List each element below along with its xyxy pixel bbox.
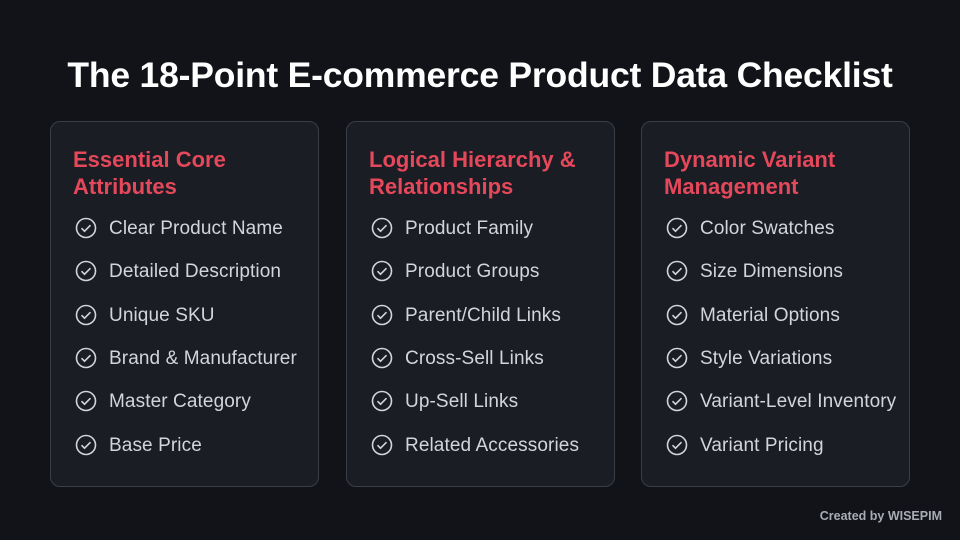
panel: hierarchy: Cross-Sell Links xyxy=(405,348,544,369)
panel: core attributes: Base Price xyxy=(109,435,202,456)
item xyxy=(372,304,561,326)
heading: variants: Management xyxy=(664,174,798,199)
panel: variants: Material Options xyxy=(700,305,840,326)
panel: core attributes: Master Category xyxy=(109,391,251,412)
panel: variants: Size Dimensions xyxy=(700,261,843,282)
heading: core: Essential Core xyxy=(73,147,226,172)
credit: Created by WISEPIM xyxy=(820,509,942,523)
panel: variants: Color Swatches xyxy=(700,218,834,239)
item xyxy=(76,260,281,282)
item xyxy=(76,304,215,326)
item xyxy=(666,434,824,456)
item xyxy=(372,260,539,282)
heading: variants xyxy=(664,147,835,199)
item xyxy=(76,348,297,369)
panel: core attributes: Clear Product Name xyxy=(109,218,283,239)
title: The 18-Point E-commerce Product Data Checklist xyxy=(67,55,893,95)
item xyxy=(76,218,283,239)
item xyxy=(666,390,896,412)
panel: variants: Variant Pricing xyxy=(700,435,824,456)
panel: hierarchy: Product Family xyxy=(405,218,533,239)
panel: core attributes: Detailed Description xyxy=(109,261,281,282)
item xyxy=(666,348,832,369)
item xyxy=(666,260,843,282)
item xyxy=(372,390,518,412)
panel: hierarchy: Parent/Child Links xyxy=(405,305,561,326)
panel: variants: Style Variations xyxy=(700,348,832,369)
item xyxy=(372,218,533,239)
panel: hierarchy: Up-Sell Links xyxy=(405,391,518,412)
panel: variants xyxy=(641,121,910,487)
heading: variants: Dynamic Variant xyxy=(664,147,835,172)
item xyxy=(76,434,202,456)
item xyxy=(372,434,579,456)
heading: core xyxy=(73,147,226,199)
heading: hierarchy: Logical Hierarchy & xyxy=(369,147,576,172)
item xyxy=(372,348,544,369)
panel: core attributes: Brand & Manufacturer xyxy=(109,348,297,369)
heading: core: Attributes xyxy=(73,174,177,199)
panel: core attributes xyxy=(50,121,319,487)
panel: variants: Variant-Level Inventory xyxy=(700,391,896,412)
heading: hierarchy xyxy=(369,147,576,199)
item xyxy=(666,218,834,239)
panel: hierarchy: Product Groups xyxy=(405,261,539,282)
item xyxy=(76,390,251,412)
panel: core attributes: Unique SKU xyxy=(109,305,215,326)
panel: hierarchy xyxy=(346,121,615,487)
heading: hierarchy: Relationships xyxy=(369,174,513,199)
panel: hierarchy: Related Accessories xyxy=(405,435,579,456)
item xyxy=(666,304,840,326)
